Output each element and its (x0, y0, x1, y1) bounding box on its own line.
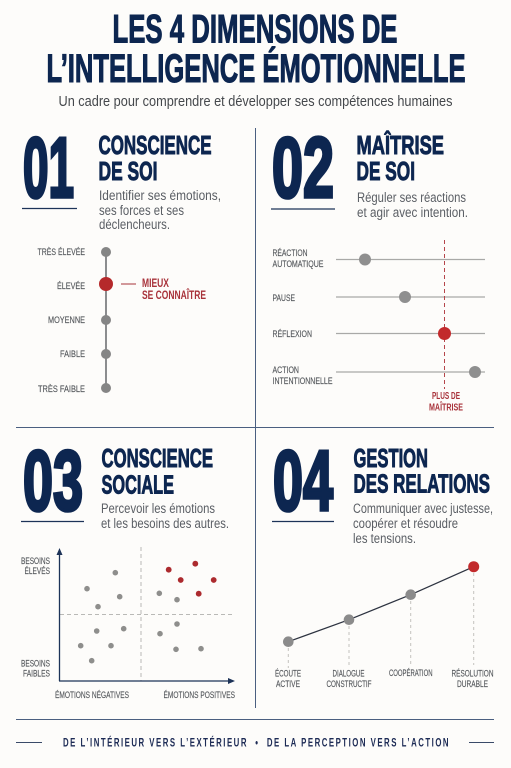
description: Percevoir les émotions (101, 501, 215, 516)
number 03: 03 (23, 434, 83, 529)
slider chart: AUTOMATIQUE (272, 259, 324, 269)
scale chart (38, 247, 206, 394)
progression line chart: RÉSOLUTION (452, 668, 494, 678)
scatter chart: BESOINS (21, 658, 50, 668)
slider chart: PAUSE (272, 293, 295, 303)
description: les tensions. (353, 531, 416, 546)
description (353, 501, 493, 546)
callout: PLUS DE (432, 391, 460, 402)
heading: DE SOI (356, 156, 415, 186)
number 02: 02 (272, 121, 334, 216)
scale chart: ÉLEVÉE (57, 281, 85, 291)
heading (98, 130, 212, 186)
description: Réguler ses réactions (357, 190, 466, 205)
footer tagline: DE L’INTÉRIEUR VERS L’EXTÉRIEUR • DE LA PERCEPTION VERS L’ACTION (63, 736, 449, 750)
heading: MAÎTRISE (356, 130, 444, 160)
panel: conscience de soi (22, 121, 221, 394)
callout: SE CONNAÎTRE (142, 287, 206, 302)
scatter chart: ÉMOTIONS NÉGATIVES (55, 690, 129, 700)
panel: conscience sociale (21, 434, 235, 700)
panel: gestion des relations (272, 434, 494, 689)
scale chart: TRÈS FAIBLE (38, 384, 85, 394)
heading: GESTION (354, 443, 428, 473)
heading: SOCIALE (102, 470, 174, 500)
heading (356, 130, 444, 186)
heading (102, 443, 213, 500)
number 01: 01 (23, 121, 74, 216)
header (46, 8, 466, 110)
callout (142, 276, 206, 302)
progression line chart: ÉCOUTE (275, 668, 301, 678)
description (101, 501, 229, 531)
heading: CONSCIENCE (98, 130, 212, 160)
slider chart: RÉACTION (272, 248, 308, 258)
callout (429, 391, 463, 414)
scatter chart (21, 547, 235, 700)
description: Identifier ses émotions, (99, 188, 221, 203)
panel: maitrise de soi (271, 121, 485, 414)
description: coopérer et résoudre (353, 516, 458, 531)
number 04: 04 (273, 434, 333, 529)
scatter chart: ÉLEVÉS (24, 566, 50, 576)
progression line chart: DIALOGUE (332, 668, 364, 678)
description: et agir avec intention. (357, 205, 468, 220)
scale chart: TRÈS ÉLEVÉE (38, 247, 85, 257)
progression line chart: DURABLE (457, 679, 488, 689)
scatter chart: FAIBLES (23, 668, 50, 678)
title (46, 8, 466, 91)
callout: MIEUX (142, 276, 169, 290)
progression line chart: CONSTRUCTIF (326, 679, 372, 689)
description (99, 188, 221, 232)
description: ses forces et ses (99, 203, 184, 218)
heading: DE SOI (98, 156, 158, 186)
slider chart: ACTION (272, 365, 299, 375)
description (357, 190, 468, 220)
progression line chart (275, 561, 494, 689)
progression line chart: ACTIVE (276, 679, 300, 689)
scatter chart: BESOINS (21, 556, 50, 566)
slider chart: RÉFLEXION (272, 329, 312, 339)
subtitle: Un cadre pour comprendre et développer ses compétences humaines (58, 94, 452, 110)
description: et les besoins des autres. (101, 516, 229, 531)
callout: MAÎTRISE (429, 400, 463, 414)
slider chart (272, 240, 485, 414)
heading (354, 443, 490, 498)
progression line chart: COOPÉRATION (389, 668, 432, 678)
scale chart: FAIBLE (60, 349, 85, 359)
description: déclencheurs. (99, 217, 170, 232)
slider chart: INTENTIONNELLE (272, 376, 332, 386)
scatter chart: ÉMOTIONS POSITIVES (164, 690, 235, 700)
scale chart: MOYENNE (48, 315, 85, 325)
heading: CONSCIENCE (102, 443, 213, 473)
